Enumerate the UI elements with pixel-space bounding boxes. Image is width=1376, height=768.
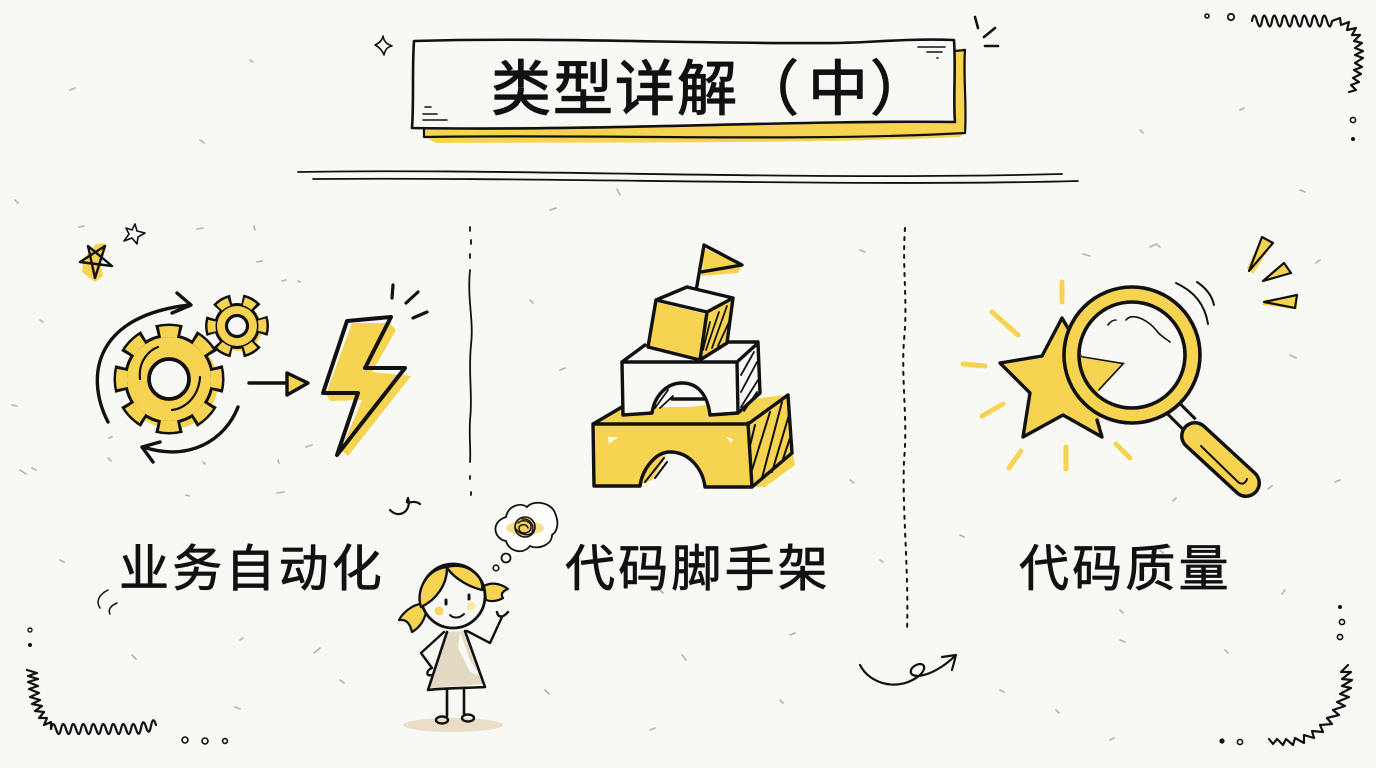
lens interior	[1082, 302, 1185, 408]
motion arcs	[1176, 282, 1214, 324]
base highlights	[608, 437, 733, 444]
yellow shadow	[424, 48, 966, 143]
label: business automation: 业务自动化	[119, 541, 385, 597]
plate accents	[423, 47, 945, 120]
burst triangles	[1247, 237, 1273, 274]
star	[1000, 318, 1125, 437]
doodle: swirl arrow	[860, 655, 956, 685]
hair pigtails	[399, 604, 426, 632]
doodle: arcs	[98, 590, 117, 614]
large gear	[119, 329, 219, 429]
corner doodle: bottom left	[27, 628, 227, 744]
base block	[593, 395, 793, 487]
cycle arrow top	[97, 293, 191, 422]
character: girl with thought bubble	[399, 503, 557, 732]
face	[434, 606, 444, 616]
hair	[420, 566, 482, 607]
top cube	[648, 287, 733, 360]
left wavy divider	[469, 227, 472, 495]
icon: star with magnifier	[963, 237, 1297, 484]
small gear	[210, 299, 264, 353]
star rays	[963, 282, 1130, 469]
doodle: swirl	[390, 498, 420, 514]
lens ring	[1071, 294, 1193, 416]
connector	[1168, 403, 1190, 425]
title plate	[412, 40, 966, 143]
icon: yellow pentagram	[80, 243, 112, 282]
corner doodle: bottom right	[1219, 605, 1352, 745]
arrow to lightning	[249, 381, 287, 385]
title text: 类型详解（中）	[491, 56, 932, 123]
ground shadow	[403, 718, 503, 732]
legs and feet	[447, 689, 464, 716]
box back outline	[424, 50, 966, 137]
arms	[421, 612, 508, 675]
lightning bolt	[323, 285, 427, 456]
emphasis ticks	[975, 17, 998, 46]
icon: outline star	[124, 224, 145, 244]
cycle arrow bottom	[142, 407, 238, 462]
thought bubble	[493, 503, 557, 571]
corner doodle: top right	[1205, 14, 1363, 141]
dividers	[469, 227, 907, 632]
middle block	[622, 343, 760, 415]
flag	[702, 248, 742, 276]
head	[421, 564, 485, 628]
dress	[430, 631, 484, 688]
sparkle	[375, 36, 392, 55]
label: code scaffolding: 代码脚手架	[565, 541, 831, 597]
box front outline	[412, 40, 955, 129]
title underline	[298, 171, 1078, 183]
base block hatching	[645, 402, 790, 482]
middle hatching	[655, 352, 758, 411]
icon: building blocks	[593, 245, 795, 488]
handle	[1195, 436, 1246, 483]
lens glint	[1108, 317, 1170, 342]
icon: automation gears	[97, 285, 427, 462]
label: code quality: 代码质量	[1019, 541, 1232, 597]
right dotted divider	[903, 228, 907, 632]
